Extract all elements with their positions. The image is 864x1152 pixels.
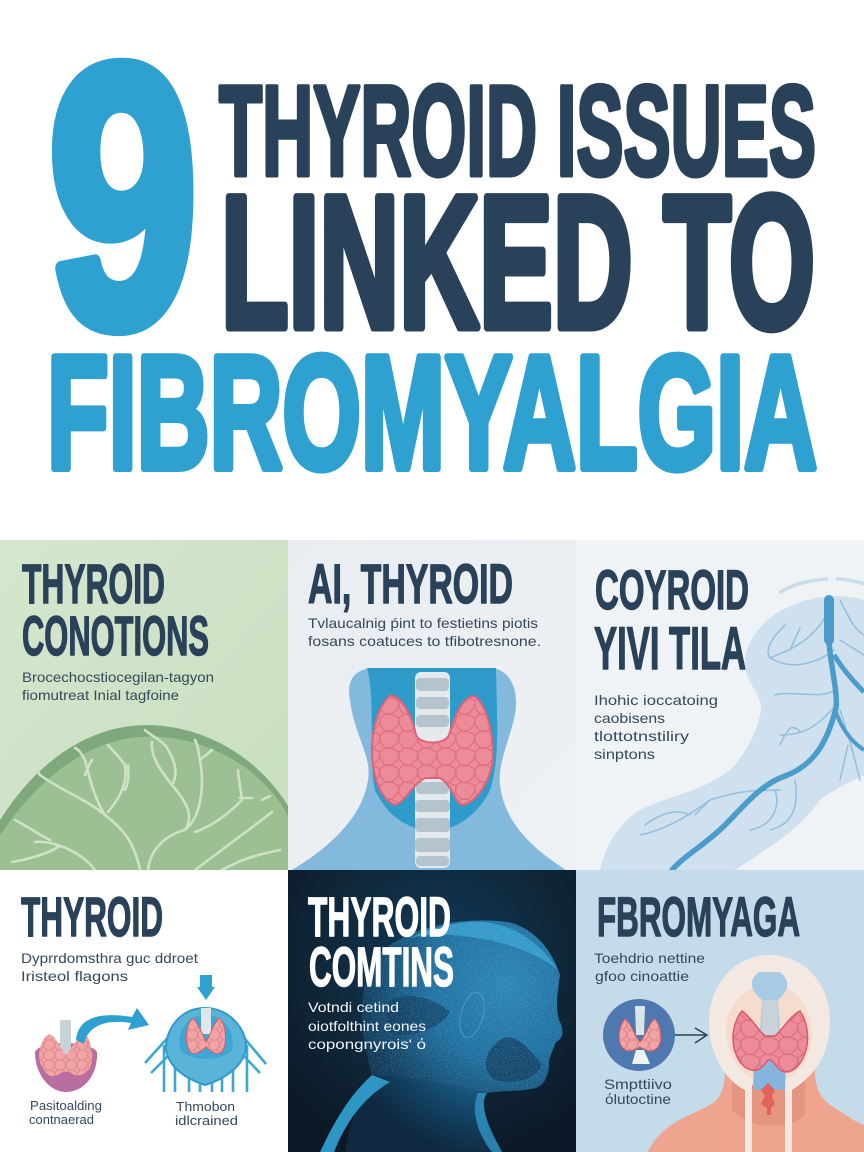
icon: thyroid in neck with spine <box>292 668 566 870</box>
arrow: down <box>197 975 215 1000</box>
icon: thyroid gland on purple base <box>35 1020 97 1092</box>
panel text: sinptons <box>594 746 655 762</box>
panel text: tlottotnstiliry <box>594 728 689 744</box>
panel text: Votndi cetind <box>308 999 399 1015</box>
panel text <box>21 950 198 984</box>
icon: blue head profile <box>320 915 570 1152</box>
panel text: Dyprrdomsthra guc ddroet <box>21 950 198 966</box>
panel heading <box>22 552 209 667</box>
icon: green dome with branches <box>0 725 288 870</box>
panel text: Ihohic ioccatoing <box>594 692 718 708</box>
arrow: to neck <box>675 1028 707 1043</box>
label: circle diagram <box>604 1076 672 1107</box>
panel text <box>594 950 705 984</box>
label: circle diagram: όlutoctine <box>605 1091 671 1107</box>
panel: fbromyaga <box>576 870 864 1152</box>
title number 9: 9 <box>48 0 198 404</box>
label: right diagram: Thmobon <box>176 1099 235 1114</box>
panel text: gfoo cinoattie <box>595 968 689 984</box>
panel heading: THYROID <box>22 552 165 615</box>
title <box>47 0 817 503</box>
icon: neck with enlarged thyroid <box>648 955 864 1152</box>
icon: thyroid in blue dome <box>145 1008 266 1092</box>
panel text <box>308 999 426 1052</box>
label: circle diagram: Smpttiivo <box>604 1076 672 1092</box>
label: right diagram: idlcrained <box>175 1113 238 1128</box>
panel: thyroid diagrams <box>0 870 288 1152</box>
panel heading <box>308 885 454 998</box>
panel text: copongnyrois' ό <box>308 1036 426 1052</box>
panel text: Iristeol flagons <box>21 968 128 984</box>
panel heading: COYROID <box>595 558 749 621</box>
panel text <box>308 615 541 649</box>
panel heading: THYROID <box>21 885 163 948</box>
panel text: caobisens <box>594 710 665 726</box>
panel heading: AI, THYROID <box>308 552 513 615</box>
icon: blue nerve branching body <box>600 579 864 870</box>
panel text: fosans coatuces to tfibotresnone. <box>308 633 541 649</box>
panel: thyroid comtins <box>288 870 576 1152</box>
panel text <box>22 669 214 703</box>
arrow: curved blue <box>76 1008 149 1044</box>
panel heading: COMTINS <box>309 935 454 998</box>
panel: thyroid conotions <box>0 540 288 870</box>
panel heading: CONOTIONS <box>22 604 209 667</box>
panel heading: THYROID <box>308 885 451 948</box>
panel text: Toehdrio nettine <box>594 950 705 966</box>
panel text: Tvlaucalnig ṕint to festietins piotis <box>308 615 538 631</box>
panel text: Brocechocstiocegilan-tagyon <box>22 669 214 685</box>
label: left diagram <box>29 1098 102 1127</box>
panel: coyroid yivi tila <box>576 540 864 870</box>
label: left diagram: Pasitoalding <box>30 1098 102 1113</box>
label: left diagram: contnaerad <box>29 1112 94 1127</box>
panel heading <box>594 558 749 682</box>
panel text: oiotfolthint eones <box>308 1018 426 1034</box>
panel: ai thyroid <box>288 540 576 870</box>
panel heading: YIVI TILA <box>594 615 746 682</box>
panel text: fiomutreat Inial tagfoine <box>22 687 179 703</box>
panel text <box>594 692 718 762</box>
label: right diagram <box>175 1099 238 1128</box>
icon: thyroid in blue circle <box>603 999 675 1071</box>
